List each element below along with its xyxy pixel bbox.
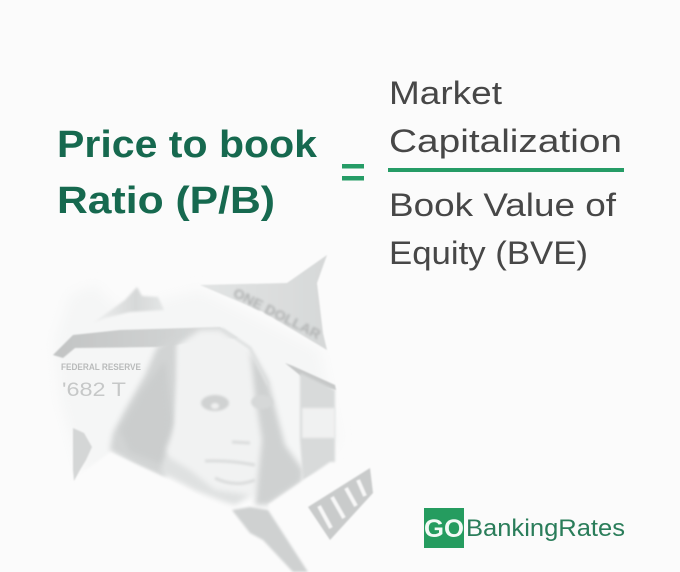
portrait left hair xyxy=(110,334,178,478)
right torn paper flap xyxy=(268,462,400,572)
bill upper band xyxy=(53,327,238,358)
portrait jaw shadow xyxy=(160,455,250,505)
denominator line 1: Book Value of xyxy=(389,187,616,223)
flap denomination digits xyxy=(319,480,365,528)
title: price to book ratio xyxy=(57,124,318,222)
fraction bar xyxy=(388,168,624,172)
right building window xyxy=(302,408,335,438)
equals sign xyxy=(342,164,364,180)
bill upper-left torn strip xyxy=(93,287,164,323)
numerator line 1: Market xyxy=(389,75,502,111)
bill border text: ONE DOLLAR xyxy=(231,284,323,342)
denominator line 2: Equity (BVE) xyxy=(389,235,588,271)
portrait crown edge xyxy=(222,329,268,385)
numerator line 2: Capitalization xyxy=(389,123,622,159)
lower torn paper flap xyxy=(72,452,300,572)
bill serial number: '682 T xyxy=(62,380,126,401)
logo wordmark: BankingRates xyxy=(466,515,625,542)
top-right corner xyxy=(200,255,327,350)
illustration: torn dollar bill with portrait xyxy=(53,255,400,572)
torn paper soft shadow xyxy=(55,285,338,490)
left torn fragment xyxy=(73,428,92,481)
logo GO letters: GO xyxy=(424,515,464,543)
portrait right hair xyxy=(250,350,303,505)
right building roof xyxy=(285,363,336,390)
right building detail xyxy=(300,373,335,480)
portrait nose and mouth xyxy=(205,442,255,484)
portrait hair shading xyxy=(120,360,172,465)
portrait eyes xyxy=(201,395,273,411)
diagonal tear shadow xyxy=(232,507,308,572)
denominator: book value of equity xyxy=(389,187,616,271)
logo: GOBankingRates xyxy=(424,508,625,548)
title line 1: Price to book xyxy=(57,124,318,166)
bill small heading: FEDERAL RESERVE xyxy=(61,362,141,372)
flap denomination block xyxy=(308,468,373,540)
logo green square xyxy=(424,508,464,548)
title line 2: Ratio (P/B) xyxy=(57,180,275,222)
numerator: market capitalization xyxy=(389,75,622,159)
portrait face xyxy=(166,330,268,502)
